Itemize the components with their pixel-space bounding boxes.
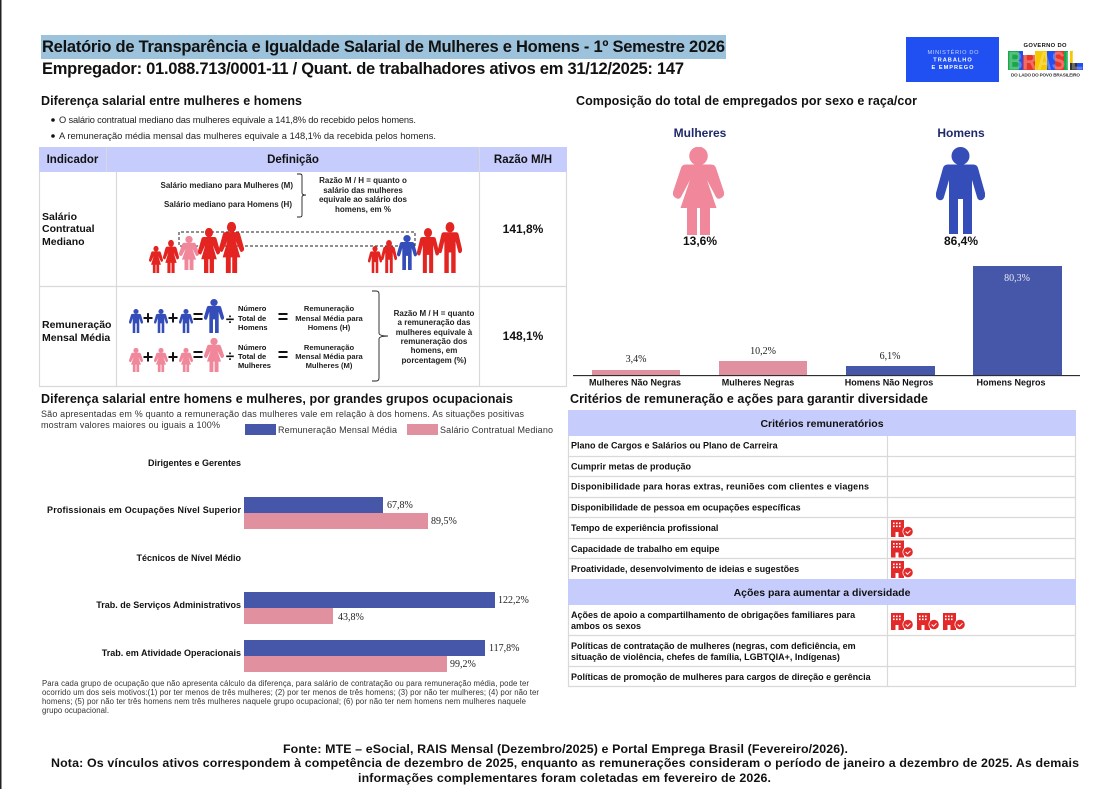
criteria list: Disponibilidade para horas extras, reuniões com clientes e viagens (571, 482, 869, 492)
bar chart: race and sex (573, 266, 1080, 388)
logo: Ministério do Trabalho e Emprego (906, 37, 999, 82)
header: report title and employer: Relatório de Transparência e Igualdade Salarial de Mulheres e Homens - 1º Semestre 2026 (42, 38, 725, 56)
definition diagram: average pay: ÷ (226, 311, 234, 328)
pictogram: women 13,6%: Mulheres (674, 126, 727, 140)
text block: footnote: Para cada grupo de ocupação que não apresenta cálculo da diferença, para salário de contratação ou para remuneração média, pode ter (42, 679, 529, 688)
definition diagram: average pay: Mensal Média para (295, 314, 364, 323)
bar chart: occupational groups (47, 458, 529, 672)
value: 141,8%: 141,8% (503, 222, 544, 236)
heading: salary difference: Diferença salarial entre mulheres e homens (41, 94, 302, 108)
table header: diversity actions (568, 579, 1076, 605)
bar chart: race and sex: 3,4% (626, 354, 646, 365)
definition diagram: average pay: Número (238, 304, 267, 313)
heading: composition: Composição do total de empregados por sexo e raça/cor (576, 94, 917, 108)
bar chart: occupational groups: Dirigentes e Gerentes (148, 458, 241, 468)
definition diagram: average pay: mulheres equivale à (396, 328, 473, 337)
definition diagram: average pay: Remuneração (304, 343, 354, 352)
criteria list (571, 440, 869, 574)
definition diagram: average pay: + (143, 308, 153, 328)
icons: actions adopted (891, 613, 966, 630)
bar chart: occupational groups: 99,2% (450, 659, 476, 670)
text block: key findings: A remuneração média mensal das mulheres equivale a 148,1% da recebida pelos homens. (59, 131, 436, 141)
bar chart: occupational groups: 67,8% (387, 500, 413, 511)
definition diagram: average pay: remuneração dos (401, 337, 468, 346)
text block: key findings: O salário contratual mediano das mulheres equivale a 141,8% do recebido pelos homens. (59, 115, 416, 125)
actions list: Políticas de promoção de mulheres para cargos de direção e gerência (571, 672, 872, 682)
definition diagram: average pay: Mulheres (238, 361, 271, 370)
value: 148,1%: 148,1% (503, 329, 544, 343)
panel: occupational groups (41, 392, 553, 715)
logo: Governo do Brasil: DO LADO DO POVO BRASILEIRO (1011, 72, 1080, 78)
panel: salary difference (39, 94, 567, 386)
legend (245, 424, 553, 435)
row label: Salário Contratual Mediano: Mediano (42, 236, 85, 248)
bar chart: race and sex: 80,3% (1004, 273, 1030, 284)
bar chart: race and sex: 10,2% (750, 346, 776, 357)
pictogram: women 13,6% (673, 126, 727, 248)
logo: Ministério do Trabalho e Emprego: TRABALHO (933, 58, 973, 64)
definition diagram: average pay: + (143, 347, 153, 367)
text block: chart description (41, 409, 524, 430)
bar chart: race and sex: Mulheres Negras (722, 378, 794, 388)
logo: Ministério do Trabalho e Emprego: MINISTÉRIO DO (928, 49, 979, 56)
row label: Salário Contratual Mediano: Contratual (42, 223, 95, 235)
criteria list: Disponibilidade de pessoa em ocupações específicas (571, 502, 801, 512)
actions list: Políticas de contratação de mulheres (negras, com deficiência, em (571, 641, 856, 651)
table header: remuneration criteria (568, 410, 1076, 436)
definition diagram: average pay: + (168, 308, 178, 328)
definition diagram: average pay: = (278, 307, 288, 327)
definition diagram: average pay: = (193, 307, 203, 327)
table header: diversity actions: Ações para aumentar a diversidade (734, 587, 911, 599)
bar chart: occupational groups: Trab. em Atividade Operacionais (102, 648, 241, 658)
actions list: Ações de apoio a compartilhamento de obrigações familiares para (571, 610, 856, 620)
footer: source and note: informações complementares foram coletadas em fevereiro de 2026. (358, 771, 771, 785)
footer: source and note: Nota: Os vínculos ativos correspondem à competência de dezembro de 2025, enquanto as remunerações consideram o período de janeiro a dezembro de 2025. As demais (51, 756, 1079, 770)
definition diagram: median salary: Salário mediano para Homens (H) (164, 200, 292, 209)
table header: Razão M/H (494, 154, 552, 166)
header: report title and employer (41, 35, 726, 78)
bar chart: occupational groups: 43,8% (338, 612, 364, 623)
definition diagram: average pay: Mulheres (M) (306, 361, 353, 370)
definition diagram: average pay: = (278, 345, 288, 365)
criteria list: Plano de Cargos e Salários ou Plano de Carreira (571, 440, 779, 450)
bar chart: occupational groups: Trab. de Serviços Administrativos (96, 600, 241, 610)
definition diagram: average pay: = (193, 345, 203, 365)
bar chart: race and sex: Mulheres Não Negras (589, 378, 681, 388)
pictogram: men 86,4%: 86,4% (944, 234, 978, 248)
definition diagram: median salary (149, 174, 462, 273)
panel: composition by sex and race (573, 94, 1080, 388)
definition diagram: average pay: Homens (238, 323, 268, 332)
definition diagram: average pay: Remuneração (304, 304, 354, 313)
definition diagram: median salary: equivale ao salário dos (319, 195, 408, 204)
footer: source and note: Fonte: MTE – eSocial, RAIS Mensal (Dezembro/2025) e Portal Emprega Brasil (Fevereiro/2026). (283, 742, 848, 756)
text block: chart description: mostram valores maiores ou iguais a 100% (41, 420, 220, 430)
pictogram: women 13,6%: 13,6% (683, 234, 717, 248)
text block: footnote: homens; (5) por não ter três homens nem três mulheres naquele grupo ocupacional; (6) por não ter nem homens nem mulheres naquele (42, 697, 526, 706)
definition diagram: average pay: a remuneração das (398, 318, 471, 327)
definition diagram: median salary: Razão M / H = quanto o (319, 176, 407, 185)
text block: footnote (42, 679, 539, 715)
bar chart: occupational groups: 122,2% (498, 595, 529, 606)
definition diagram: average pay (129, 291, 474, 381)
actions list: ambos os sexos (571, 621, 641, 631)
row label: Remuneração Mensal Média: Mensal Média (42, 332, 110, 344)
text block: key findings (51, 115, 436, 141)
bar chart: occupational groups: 117,8% (489, 643, 519, 654)
criteria list: Cumprir metas de produção (571, 462, 692, 472)
table header: Indicador (47, 154, 99, 166)
panel: remuneration criteria and diversity actions (568, 392, 1076, 686)
table header: remuneration criteria: Critérios remuneratórios (760, 418, 884, 430)
logo: Governo do Brasil (1008, 43, 1083, 78)
heading: occupational groups: Diferença salarial entre homens e mulheres, por grandes grupos ocupacionais (41, 392, 513, 406)
heading: criteria: Critérios de remuneração e ações para garantir diversidade (570, 392, 928, 406)
criteria list: Capacidade de trabalho em equipe (571, 544, 720, 554)
definition diagram: average pay: + (168, 347, 178, 367)
bar chart: race and sex: Homens Negros (976, 378, 1046, 388)
legend: Salário Contratual Mediano (440, 425, 553, 435)
actions list: situação de violência, chefes de família, LGBTQIA+, Indígenas) (571, 652, 840, 662)
header: report title and employer: Empregador: 01.088.713/0001-11 / Quant. de trabalhadores ativos em 31/12/2025: 147 (42, 60, 684, 78)
bar chart: occupational groups: Técnicos de Nível Médio (136, 553, 241, 563)
row label: Salário Contratual Mediano: Salário (42, 211, 77, 223)
definition diagram: average pay: Total de (238, 314, 266, 323)
logo: Ministério do Trabalho e Emprego: E EMPREGO (932, 65, 974, 71)
definition diagram: average pay: Mensal Média para (295, 352, 364, 361)
criteria list: Proatividade, desenvolvimento de ideias e sugestões (571, 564, 799, 574)
definition diagram: median salary: homens, em % (335, 205, 391, 214)
row label: Remuneração Mensal Média: Remuneração (42, 319, 111, 331)
legend: Remuneração Mensal Média (278, 425, 397, 435)
bar chart: race and sex: Homens Não Negros (845, 378, 933, 388)
footer: source and note (51, 742, 1079, 785)
definition diagram: average pay: homens, em (411, 346, 457, 355)
definition diagram: average pay: Total de (238, 352, 266, 361)
bar chart: occupational groups: Profissionais em Ocupações Nível Superior (47, 505, 241, 515)
definition diagram: median salary: salário das mulheres (323, 186, 403, 195)
text block: footnote: ocorrido um dos seis motivos:(1) por ter menos de três mulheres; (2) por ter menos de três homens; (3) por não ter mulheres; (4) por não ter (42, 688, 539, 697)
definition diagram: average pay: porcentagem (%) (402, 356, 467, 365)
definition diagram: average pay: ÷ (226, 348, 234, 365)
bar chart: occupational groups: 89,5% (431, 516, 457, 527)
text block: chart description: São apresentadas em % quanto a remuneração das mulheres vale em relação à dos homens. As situações positivas (41, 409, 524, 419)
actions list (571, 610, 872, 682)
criteria list: Tempo de experiência profissional (571, 523, 718, 533)
bar chart: race and sex: 6,1% (880, 351, 900, 362)
icons: criteria adopted (891, 520, 914, 578)
pictogram: men 86,4%: Homens (937, 126, 985, 140)
definition diagram: average pay: Número (238, 343, 267, 352)
definition diagram: average pay: Razão M / H = quanto (394, 309, 474, 318)
text block: footnote: grupo ocupacional. (42, 706, 109, 715)
logo: Governo do Brasil: BRASIL (1008, 48, 1083, 76)
table header (39, 147, 567, 172)
table header: Definição (267, 154, 319, 166)
definition diagram: median salary: Salário mediano para Mulheres (M) (161, 181, 293, 190)
logo: Governo do Brasil: GOVERNO DO (1024, 43, 1067, 49)
pictogram: men 86,4% (936, 126, 985, 248)
definition diagram: average pay: Homens (H) (308, 323, 351, 332)
